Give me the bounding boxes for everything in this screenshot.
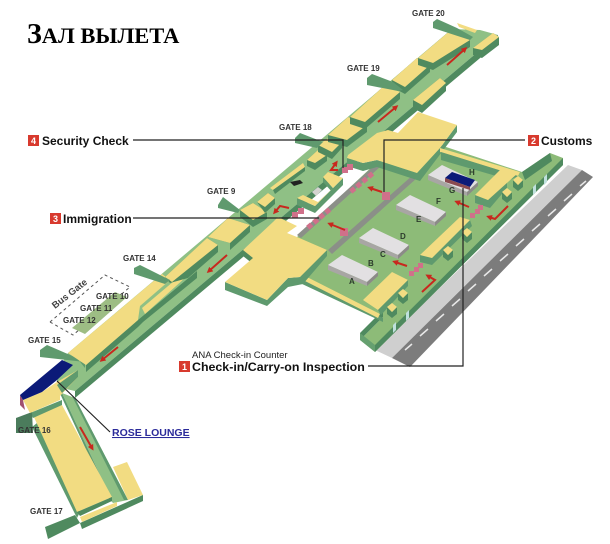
counter letters: A <box>349 277 355 286</box>
inner security building <box>290 172 343 213</box>
counter letters: G <box>449 186 455 195</box>
bus gate area <box>50 275 130 335</box>
gate labels: GATE 12 <box>63 316 96 325</box>
departure hall floor <box>296 145 563 352</box>
label: customs: 2 <box>531 136 536 146</box>
gate labels: GATE 14 <box>123 254 156 263</box>
concourse yellow blocks <box>68 23 499 372</box>
gate labels <box>18 9 445 516</box>
gate piers <box>134 19 473 284</box>
small kiosks <box>387 176 523 318</box>
bus gate area: Bus Gate <box>50 277 90 311</box>
inspection points <box>292 164 483 276</box>
leader lines <box>57 140 525 432</box>
gate labels: GATE 20 <box>412 9 445 18</box>
label: check-in: 1 <box>182 362 187 372</box>
label: immigration: 3 <box>53 214 58 224</box>
counter letters: D <box>400 232 406 241</box>
title: ЗАЛ ВЫЛЕТА <box>27 19 180 50</box>
counter letters <box>349 168 475 286</box>
rose lounge block <box>20 360 78 413</box>
gate labels: GATE 18 <box>279 123 312 132</box>
north yellow block <box>347 112 520 181</box>
counter letters: E <box>416 215 422 224</box>
label: check-in: Check-in/Carry-on Inspection <box>192 360 365 374</box>
gate labels: GATE 17 <box>30 507 63 516</box>
gate labels: GATE 9 <box>207 187 236 196</box>
curbside doors <box>393 174 547 333</box>
concourse corridor <box>57 29 498 398</box>
label: customs: Customs <box>541 134 593 148</box>
road <box>375 165 593 367</box>
label: immigration: Immigration <box>63 212 132 226</box>
label: check-in <box>179 350 365 374</box>
gate labels: GATE 19 <box>347 64 380 73</box>
gate 15 pier <box>40 345 85 368</box>
counter letters: H <box>469 168 475 177</box>
label: security check: 4 <box>31 136 36 146</box>
gate labels: GATE 16 <box>18 426 51 435</box>
label: security check: Security Check <box>42 134 129 148</box>
south wing <box>30 387 143 529</box>
main terminal yellow block <box>225 217 327 306</box>
check-in counters: A to H <box>328 165 478 286</box>
label: check-in: ANA Check-in Counter <box>192 350 288 361</box>
gate labels: GATE 15 <box>28 336 61 345</box>
counter letters: C <box>380 250 386 259</box>
check-in yellow blocks <box>363 168 518 315</box>
counter letters: B <box>368 259 374 268</box>
gate 16 pier <box>16 412 33 433</box>
counter letters: F <box>436 197 441 206</box>
gate labels: GATE 11 <box>80 304 113 313</box>
label: rose lounge: ROSE LOUNGE <box>112 427 190 439</box>
flow arrows <box>80 49 508 448</box>
gate 17 pier <box>45 515 80 539</box>
gate labels: GATE 10 <box>96 292 129 301</box>
